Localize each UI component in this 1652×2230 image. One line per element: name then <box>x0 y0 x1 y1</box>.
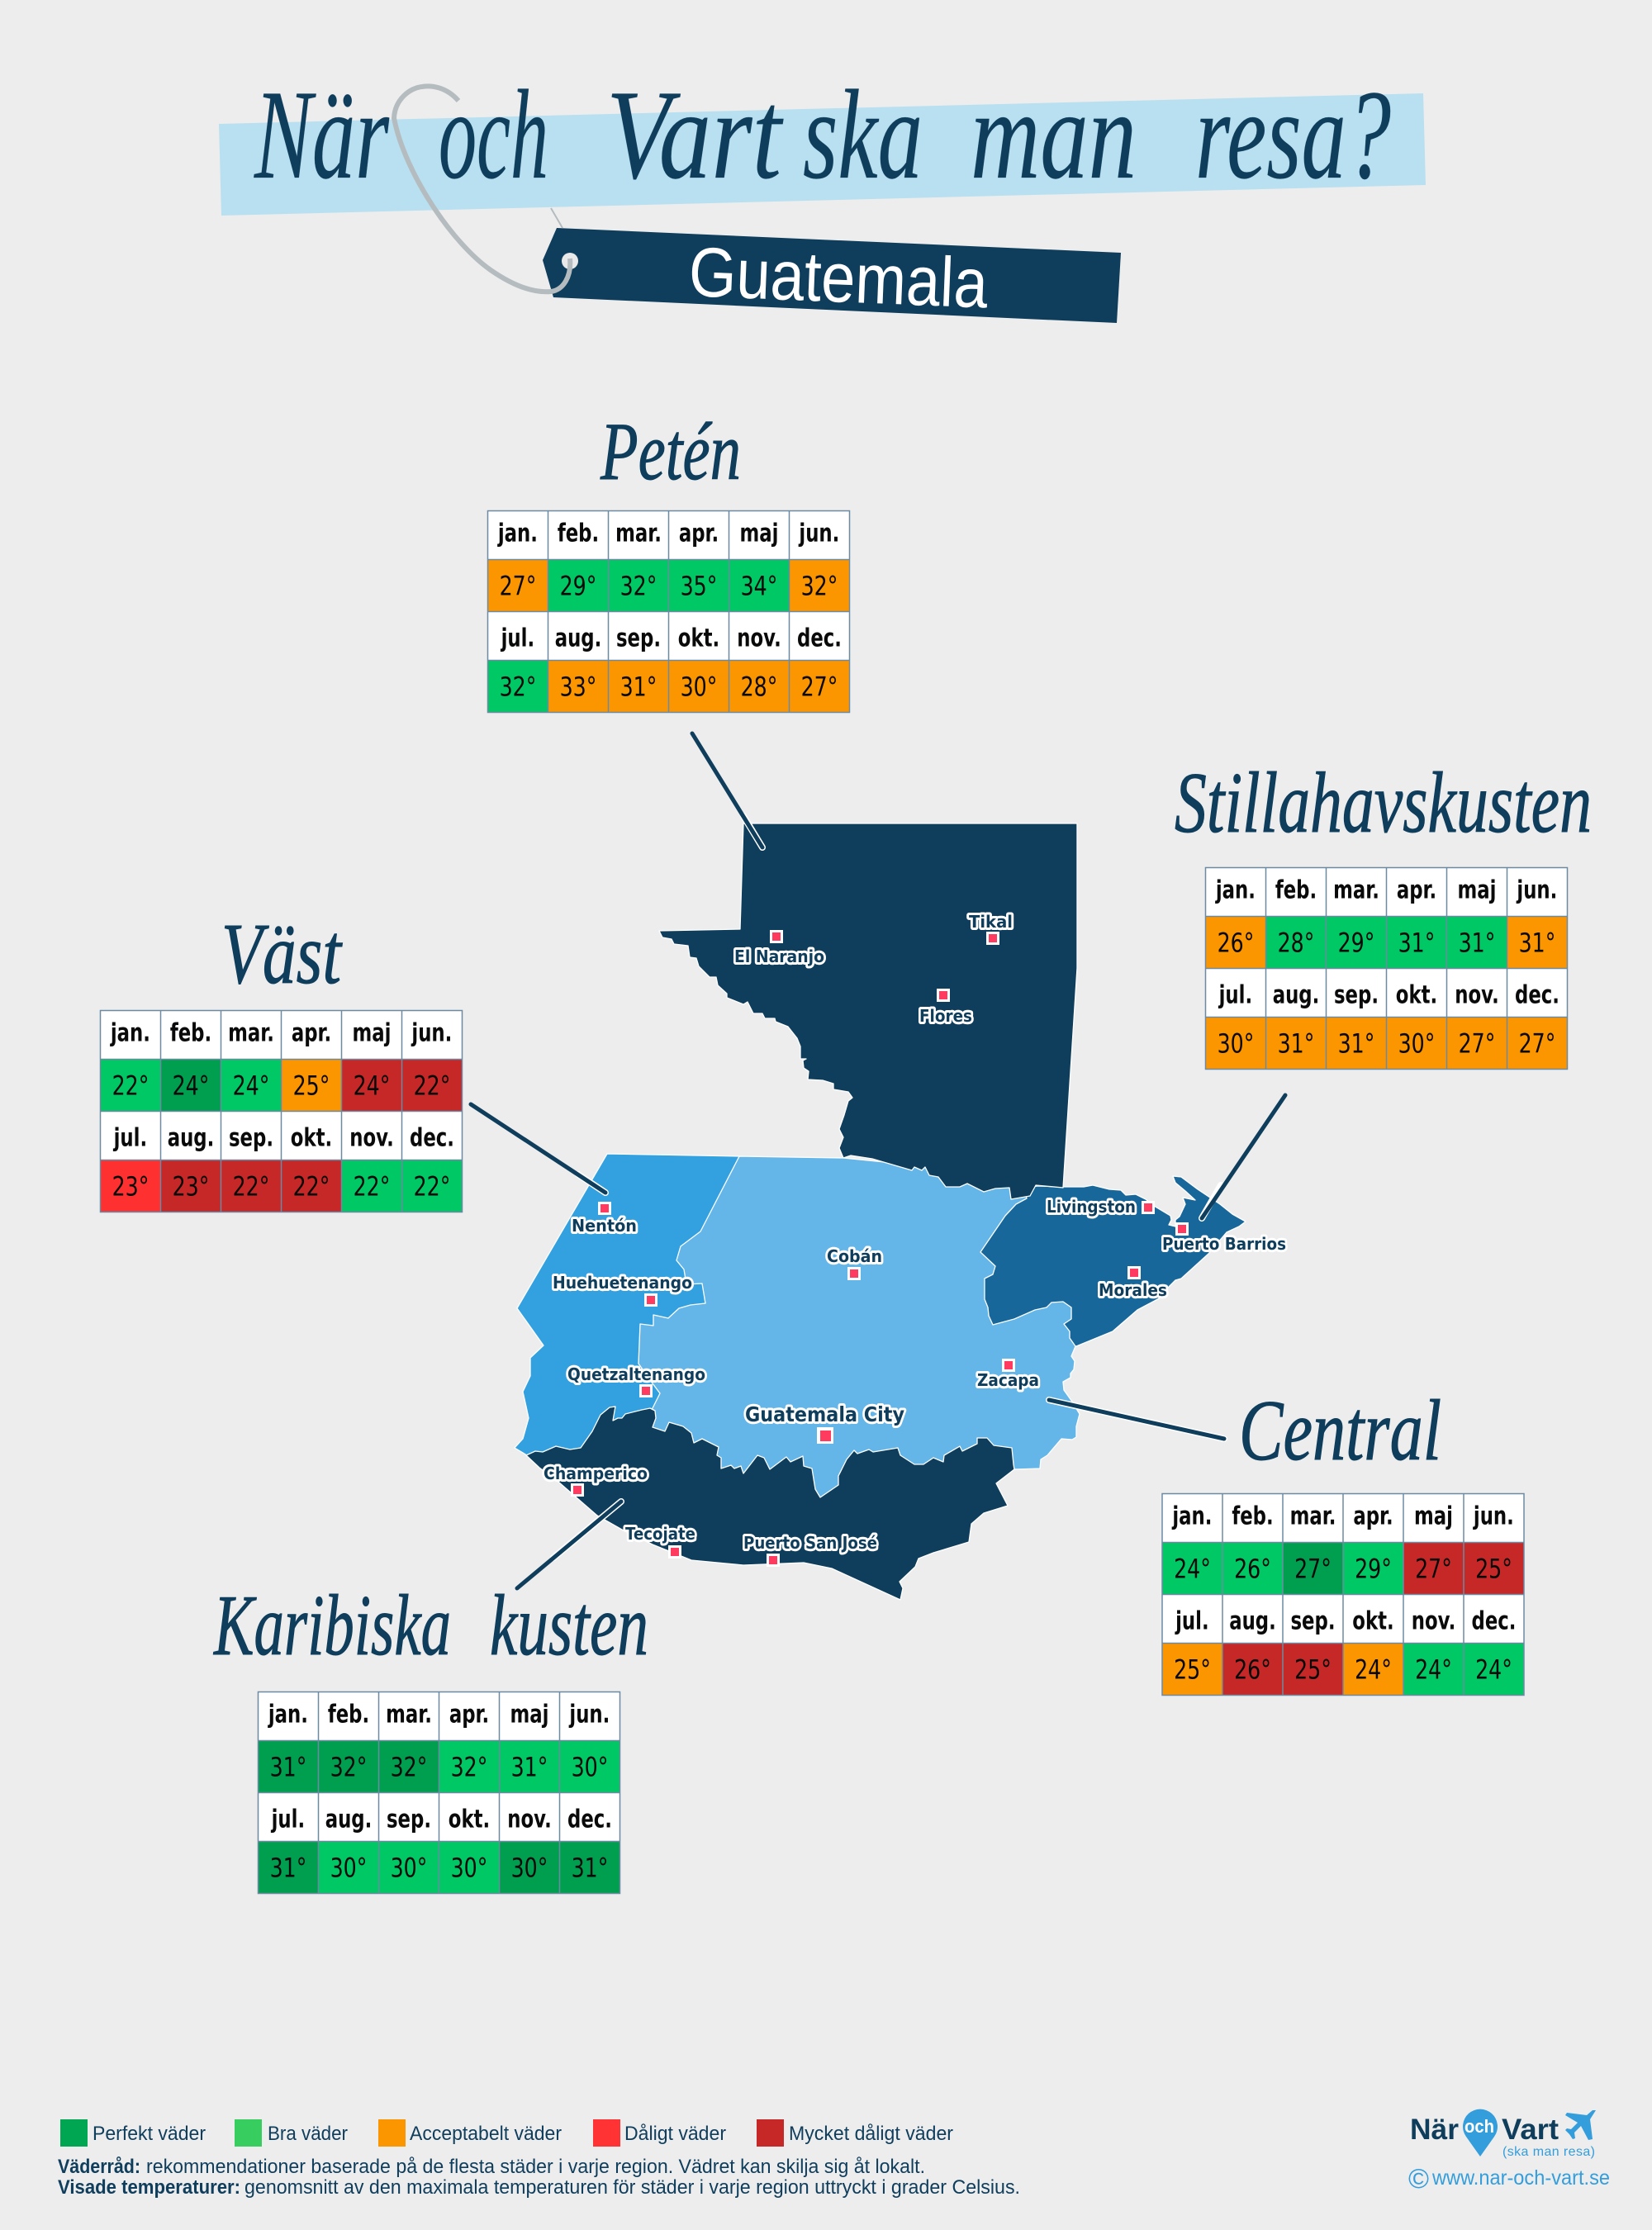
table: Väst: 23° <box>173 1171 209 1202</box>
table: Karibiska kusten: 32° <box>330 1752 367 1782</box>
table: Petén: aug. <box>555 624 601 652</box>
table: Karibiska kusten <box>258 1691 620 1893</box>
city: Tecojate <box>625 1524 695 1559</box>
table: Petén: 32° <box>620 571 657 601</box>
city: Nentón: Nentón <box>572 1216 637 1236</box>
city: Tecojate: Tecojate <box>625 1524 695 1544</box>
logo: När <box>1410 2114 1459 2146</box>
leader line: Stillahavskusten <box>1202 1095 1285 1218</box>
table: Stillahavskusten: nov. <box>1455 980 1499 1009</box>
title: och <box>439 64 548 206</box>
table: Petén: apr. <box>679 519 719 548</box>
table: Petén: 32° <box>801 571 838 601</box>
table: Väst: 23° <box>112 1171 149 1202</box>
table: Stillahavskusten: 31° <box>1278 1028 1314 1059</box>
city: Tikal: Tikal <box>969 912 1013 932</box>
leader line: Karibiska kusten <box>517 1502 621 1588</box>
table: Stillahavskusten: jan. <box>1215 875 1256 904</box>
table: Väst: apr. <box>292 1018 331 1047</box>
title: När <box>254 64 389 206</box>
table: Stillahavskusten: 31° <box>1338 1028 1374 1059</box>
city: Huehuetenango <box>553 1273 692 1307</box>
table: Väst: dec. <box>410 1123 454 1152</box>
title: Vart <box>606 64 784 206</box>
table: Central: okt. <box>1352 1606 1394 1635</box>
table: Petén <box>487 510 849 712</box>
table: Karibiska kusten: 31° <box>572 1853 608 1883</box>
table: Stillahavskusten: 31° <box>1459 928 1495 958</box>
city: El Naranjo <box>734 930 824 966</box>
table: Karibiska kusten: 32° <box>391 1752 427 1782</box>
table: Stillahavskusten: jun. <box>1517 875 1557 904</box>
footnotes: Väderråd: <box>58 2156 140 2178</box>
logo: och <box>1464 2116 1494 2137</box>
city: Livingston: Livingston <box>1047 1197 1136 1217</box>
table: Stillahavskusten: okt. <box>1396 980 1437 1009</box>
table: Central: jun. <box>1473 1502 1514 1530</box>
table: Stillahavskusten: 31° <box>1398 928 1435 958</box>
country tag: Guatemala <box>687 233 990 324</box>
table: Central: 24° <box>1475 1654 1512 1685</box>
table: Central: 27° <box>1415 1554 1452 1584</box>
footnotes: rekommendationer baserade på de flesta städer i varje region. Vädret kan skilja sig åt lokalt. <box>146 2156 925 2178</box>
city: El Naranjo: El Naranjo <box>734 947 824 966</box>
table: Petén: feb. <box>558 519 599 548</box>
table: Petén: nov. <box>737 624 781 652</box>
table: Väst: sep. <box>229 1123 273 1152</box>
table: Karibiska kusten: maj <box>510 1700 548 1729</box>
city: Guatemala City: Guatemala City <box>745 1402 904 1426</box>
table: Stillahavskusten: sep. <box>1334 980 1379 1009</box>
table: Väst: maj <box>353 1018 391 1047</box>
city: Zacapa <box>977 1359 1039 1390</box>
table: Väst: 22° <box>414 1171 450 1202</box>
table: Petén: jun. <box>799 519 839 548</box>
city: Morales <box>1099 1266 1167 1300</box>
footnotes <box>58 2156 1020 2199</box>
table: Väst: nov. <box>349 1123 394 1152</box>
table: Väst: mar. <box>228 1018 274 1047</box>
city: Flores: Flores <box>919 1006 972 1026</box>
city: Quetzaltenango: Quetzaltenango <box>567 1364 705 1384</box>
table: Central: apr. <box>1353 1502 1393 1530</box>
footnotes: Visade temperaturer: <box>58 2176 240 2199</box>
table: Stillahavskusten: 28° <box>1278 928 1314 958</box>
table: Central: sep. <box>1291 1606 1335 1635</box>
table: Petén: okt. <box>678 624 719 652</box>
city: Champerico <box>544 1464 648 1497</box>
city: Puerto Barrios: Puerto Barrios <box>1162 1234 1286 1254</box>
table: Karibiska kusten: 31° <box>270 1853 306 1883</box>
table: Karibiska kusten: jun. <box>569 1700 610 1729</box>
table: Karibiska kusten: sep. <box>387 1805 431 1834</box>
table: Stillahavskusten: 27° <box>1519 1028 1555 1059</box>
table: Karibiska kusten: okt. <box>449 1805 490 1834</box>
leader line: Petén <box>692 733 762 847</box>
city: Tikal <box>969 912 1013 945</box>
table: Petén: 27° <box>500 571 536 601</box>
website: © <box>1408 2163 1429 2194</box>
title: man <box>971 64 1137 206</box>
table: Central: jul. <box>1175 1606 1209 1635</box>
table: Stillahavskusten: aug. <box>1273 980 1319 1009</box>
table: Petén: sep. <box>616 624 661 652</box>
table: Central: 25° <box>1294 1654 1332 1685</box>
table: Karibiska kusten: 31° <box>511 1752 548 1782</box>
table: Karibiska kusten: nov. <box>507 1805 552 1834</box>
heading: Väst: Väst <box>221 905 343 1002</box>
region: Central <box>628 1156 1080 1520</box>
table: Väst: jul. <box>113 1123 147 1152</box>
table: Stillahavskusten <box>1206 867 1568 1069</box>
website <box>1408 2163 1610 2194</box>
legend: Acceptabelt väder <box>410 2123 562 2145</box>
table: Karibiska kusten: jan. <box>268 1700 308 1729</box>
city: Puerto San José: Puerto San José <box>743 1533 877 1553</box>
city: Morales: Morales <box>1099 1280 1167 1300</box>
leader line: Central <box>1049 1400 1224 1439</box>
table: Petén: 33° <box>560 671 596 702</box>
table: Karibiska kusten: 30° <box>511 1853 548 1883</box>
table: Petén: jul. <box>501 624 534 652</box>
table: Petén: mar. <box>615 519 662 548</box>
panel: Karibiska kusten <box>213 1577 648 1893</box>
table: Väst: 24° <box>233 1070 269 1101</box>
table: Stillahavskusten: 29° <box>1338 928 1374 958</box>
table: Petén: 35° <box>681 571 717 601</box>
table: Väst: 22° <box>354 1171 390 1202</box>
table: Stillahavskusten: 30° <box>1218 1028 1254 1059</box>
legend: Bra väder <box>268 2123 348 2145</box>
table: Central: 24° <box>1415 1654 1452 1685</box>
footnotes: genomsnitt av den maximala temperaturen för städer i varje region uttryckt i grader Celsius. <box>244 2176 1020 2199</box>
table: Central: 25° <box>1475 1554 1512 1584</box>
table: Central: aug. <box>1229 1606 1276 1635</box>
table: Karibiska kusten: 30° <box>391 1853 427 1883</box>
city: Puerto San José <box>743 1533 877 1567</box>
table: Väst: okt. <box>291 1123 332 1152</box>
table: Central: dec. <box>1472 1606 1516 1635</box>
table: Väst: jan. <box>110 1018 150 1047</box>
table: Central: 26° <box>1234 1654 1271 1685</box>
table: Stillahavskusten: 31° <box>1519 928 1555 958</box>
logo: Vart <box>1502 2114 1559 2146</box>
table: Stillahavskusten: 27° <box>1459 1028 1495 1059</box>
city: Puerto Barrios <box>1162 1222 1286 1254</box>
table: Petén: dec. <box>797 624 842 652</box>
table: Petén: 32° <box>500 671 536 702</box>
table: Petén: 29° <box>560 571 596 601</box>
map of Guatemala <box>515 823 1246 1600</box>
table: Central: 26° <box>1234 1554 1271 1584</box>
table: Karibiska kusten: apr. <box>449 1700 489 1729</box>
table: Väst: 24° <box>354 1070 390 1101</box>
table: Väst <box>101 1011 463 1212</box>
legend: Dåligt väder <box>624 2123 726 2145</box>
table: Karibiska kusten: 32° <box>451 1752 487 1782</box>
table: Stillahavskusten: 30° <box>1398 1028 1435 1059</box>
legend: Mycket dåligt väder <box>789 2123 953 2145</box>
table: Väst: 22° <box>112 1070 149 1101</box>
table: Karibiska kusten: jul. <box>271 1805 305 1834</box>
table: Karibiska kusten: aug. <box>325 1805 372 1834</box>
table: Petén: jan. <box>497 519 538 548</box>
table: Väst: 22° <box>293 1171 330 1202</box>
heading: Petén: Petén <box>600 406 741 497</box>
table: Stillahavskusten: apr. <box>1397 875 1436 904</box>
table: Petén: 30° <box>681 671 717 702</box>
table: Karibiska kusten: mar. <box>386 1700 432 1729</box>
logo: (ska man resa) <box>1502 2145 1595 2159</box>
table: Central: jan. <box>1171 1502 1212 1530</box>
region: Väst <box>515 1154 739 1462</box>
heading: Karibiska kusten: kusten <box>490 1577 648 1673</box>
city: Flores <box>919 989 972 1026</box>
table: Karibiska kusten: 30° <box>572 1752 608 1782</box>
title <box>254 64 1391 206</box>
website: www.nar-och-vart.se <box>1431 2166 1610 2190</box>
title band <box>219 93 1426 216</box>
table: Central: maj <box>1414 1502 1453 1530</box>
table: Petén: 27° <box>801 671 838 702</box>
table: Central: 24° <box>1355 1654 1392 1685</box>
heading: Karibiska kusten: Karibiska <box>213 1577 451 1673</box>
country tag <box>543 228 1121 324</box>
table: Väst: 22° <box>414 1070 450 1101</box>
table: Petén: 28° <box>741 671 777 702</box>
leader line: Väst <box>471 1104 605 1193</box>
table: Stillahavskusten: jul. <box>1218 980 1252 1009</box>
table: Petén: maj <box>740 519 778 548</box>
table: Stillahavskusten: mar. <box>1333 875 1379 904</box>
table: Väst: jun. <box>411 1018 452 1047</box>
table: Petén: 31° <box>620 671 657 702</box>
city: Nentón <box>572 1202 637 1236</box>
tag string <box>394 86 570 292</box>
table: Väst: feb. <box>170 1018 211 1047</box>
logo <box>1410 2109 1596 2159</box>
region: Stillahavskusten <box>966 1176 1246 1346</box>
legend: Perfekt väder <box>93 2123 206 2145</box>
table: Central: 27° <box>1294 1554 1332 1584</box>
region: Petén <box>659 823 1077 1199</box>
table: Central: nov. <box>1412 1606 1455 1635</box>
panel: Stillahavskusten <box>1175 754 1592 1069</box>
table: Central: 29° <box>1355 1554 1392 1584</box>
panel: Central <box>1162 1382 1524 1695</box>
city: Quetzaltenango <box>567 1364 705 1397</box>
heading: Central: Central <box>1239 1382 1441 1478</box>
city: Cobán: Cobán <box>827 1246 882 1266</box>
table: Petén: 34° <box>741 571 777 601</box>
table: Central: 24° <box>1174 1554 1211 1584</box>
legend <box>60 2119 953 2147</box>
table: Stillahavskusten: dec. <box>1515 980 1559 1009</box>
table: Karibiska kusten: feb. <box>328 1700 369 1729</box>
table: Väst: 22° <box>233 1171 269 1202</box>
city: Champerico: Champerico <box>544 1464 648 1483</box>
table: Stillahavskusten: 26° <box>1218 928 1254 958</box>
title: ska <box>803 64 923 206</box>
table: Karibiska kusten: 31° <box>270 1752 306 1782</box>
city: Zacapa: Zacapa <box>977 1370 1039 1390</box>
table: Central: 25° <box>1174 1654 1211 1685</box>
table: Stillahavskusten: feb. <box>1275 875 1317 904</box>
city: Guatemala City <box>745 1402 904 1444</box>
table: Central <box>1162 1493 1524 1695</box>
table: Väst: 25° <box>293 1070 330 1101</box>
table: Central: feb. <box>1232 1502 1274 1530</box>
city: Cobán <box>827 1246 882 1280</box>
table: Väst: 24° <box>173 1070 209 1101</box>
city: Huehuetenango: Huehuetenango <box>553 1273 692 1293</box>
table: Karibiska kusten: 30° <box>451 1853 487 1883</box>
table: Karibiska kusten: 30° <box>330 1853 367 1883</box>
region: Karibiska kusten <box>526 1407 1014 1600</box>
table: Karibiska kusten: dec. <box>567 1805 612 1834</box>
panel: Petén <box>487 406 849 712</box>
table: Väst: aug. <box>168 1123 214 1152</box>
title: resa? <box>1195 64 1391 206</box>
panel: Väst <box>101 905 463 1212</box>
table: Stillahavskusten: maj <box>1458 875 1496 904</box>
table: Central: mar. <box>1290 1502 1336 1530</box>
